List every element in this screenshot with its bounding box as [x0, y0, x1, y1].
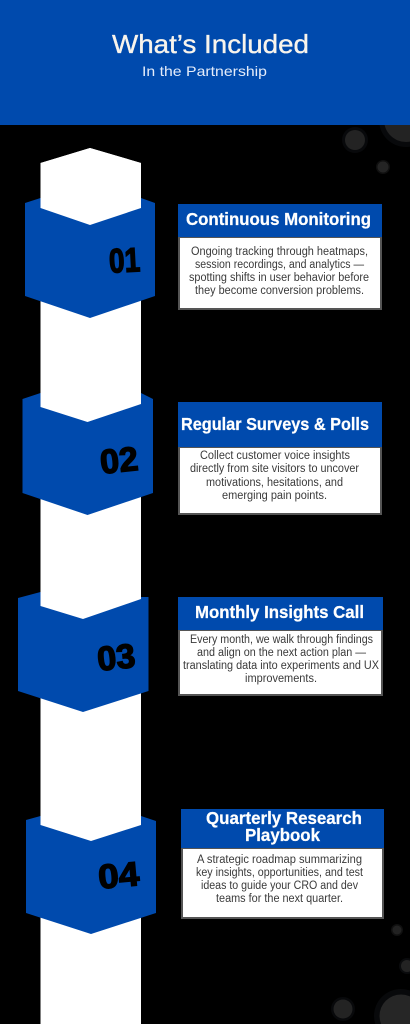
card 3 body: translating data into experiments and UX	[183, 660, 379, 672]
card 4 body	[196, 854, 364, 905]
card 2 body: directly from site visitors to uncover	[190, 463, 359, 475]
card 2 body: emerging pain points.	[222, 490, 327, 502]
card 4 body: ideas to guide your CRO and dev	[201, 880, 358, 892]
card 4 heading	[206, 808, 362, 845]
card 2 body: Collect customer voice insights	[200, 450, 350, 462]
white vertical pillar	[40, 148, 141, 1024]
card 4 heading: Playbook	[245, 825, 320, 845]
step 02 hexagon	[22, 340, 153, 515]
card 3 body: improvements.	[245, 673, 317, 685]
card 2: regular surveys and polls	[178, 402, 382, 514]
number 02: 02	[98, 440, 140, 482]
card 4: quarterly research playbook	[181, 808, 384, 918]
card 3 body: and align on the next action plan —	[197, 647, 366, 659]
card 1: continuous monitoring	[178, 204, 382, 309]
decorative bubbles bottom right	[331, 924, 410, 1024]
subtitle: In the Partnership	[142, 63, 267, 79]
card 1 body: they become conversion problems.	[195, 285, 364, 297]
card 3 body: Every month, we walk through findings	[190, 634, 373, 646]
step 01 hexagon	[25, 148, 155, 318]
card 4 body: A strategic roadmap summarizing	[197, 854, 362, 866]
header band	[0, 0, 410, 125]
card 1 body	[189, 246, 369, 297]
card 1 body: Ongoing tracking through heatmaps,	[191, 246, 368, 258]
number 01: 01	[108, 241, 141, 281]
step 04 hexagon	[26, 760, 156, 934]
card 2 body: motivations, hesitations, and	[206, 477, 343, 489]
card 3: monthly insights call	[178, 597, 383, 695]
title: What’s Included	[112, 29, 309, 59]
card 4 heading: Quarterly Research	[206, 808, 362, 828]
decorative bubbles top right	[342, 93, 410, 174]
card 1 body: spotting shifts in user behavior before	[189, 272, 369, 284]
card 4 body: teams for the next quarter.	[216, 893, 343, 905]
step 03 hexagon	[18, 540, 148, 712]
card 1 heading: Continuous Monitoring	[186, 209, 371, 229]
card 3 body	[183, 634, 379, 685]
number 03: 03	[95, 637, 137, 679]
card 2 body	[190, 450, 359, 502]
card 2 heading: Regular Surveys & Polls	[181, 414, 369, 434]
number 04: 04	[97, 855, 141, 897]
card 1 body: session recordings, and analytics —	[195, 259, 364, 271]
card 4 body: key insights, opportunities, and test	[196, 867, 364, 879]
card 3 heading: Monthly Insights Call	[195, 602, 364, 622]
